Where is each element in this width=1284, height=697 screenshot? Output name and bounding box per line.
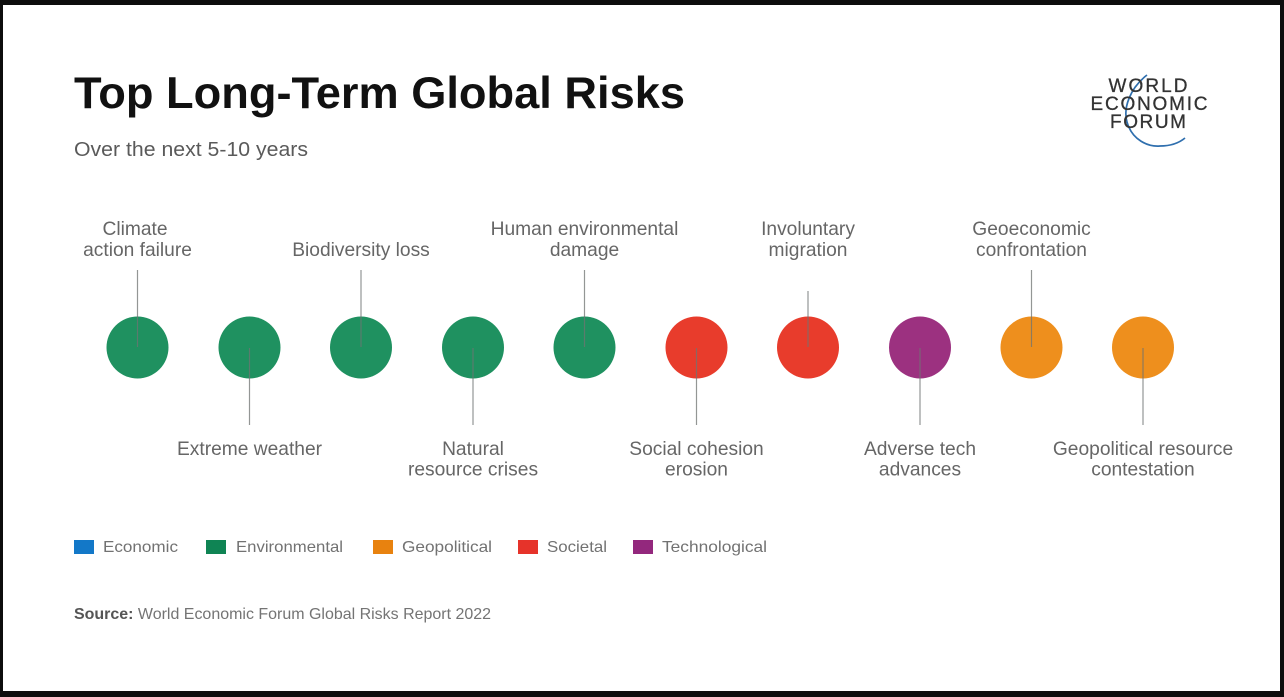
legend: Societal xyxy=(518,539,607,556)
risk: Biodiversity loss xyxy=(292,240,430,378)
logo: World Economic Forum xyxy=(1090,75,1208,146)
risk: Involuntary migration: Involuntary xyxy=(761,219,855,240)
risk: Human environmental damage: damage xyxy=(550,240,619,261)
risk: Geoeconomic confrontation: confrontation xyxy=(976,240,1087,261)
risk: Natural resource crises: resource crises xyxy=(408,460,538,480)
risk: Climate action failure: action failure xyxy=(83,240,192,261)
risk: Geopolitical resource contestation: Geopolitical resource xyxy=(1053,439,1233,460)
risk: Extreme weather xyxy=(177,316,323,460)
risk: Involuntary migration: migration xyxy=(769,240,847,261)
risk: Natural resource crises xyxy=(408,316,538,480)
risk: Adverse tech advances xyxy=(864,316,976,480)
logo: World Economic Forum: WORLD xyxy=(1108,76,1188,97)
legend: Geopolitical: Geopolitical xyxy=(402,539,492,556)
risk: Geoeconomic confrontation xyxy=(972,219,1091,378)
legend: Societal: Societal xyxy=(547,539,607,556)
risk: Involuntary migration xyxy=(761,219,855,378)
risk: Adverse tech advances: Adverse tech xyxy=(864,439,976,460)
logo: World Economic Forum: FORUM xyxy=(1110,112,1186,133)
risk: Social cohesion erosion xyxy=(629,316,764,480)
risk: Natural resource crises: Natural xyxy=(442,439,504,460)
risk: Climate action failure: Climate xyxy=(102,219,168,240)
title: Top Long-Term Global Risks xyxy=(74,69,685,118)
risk: Climate action failure xyxy=(83,219,192,378)
risk: Social cohesion erosion: Social cohesion xyxy=(629,439,764,460)
subtitle: Over the next 5-10 years xyxy=(74,139,308,161)
risk: Geopolitical resource contestation xyxy=(1053,316,1233,480)
risk: Extreme weather: Extreme weather xyxy=(177,439,323,460)
risk: Geopolitical resource contestation: contestation xyxy=(1091,460,1195,480)
logo: World Economic Forum: ECONOMIC xyxy=(1090,94,1208,115)
legend: Technological: Technological xyxy=(662,539,767,556)
legend xyxy=(74,539,767,556)
risk: Human environmental damage: Human environmental xyxy=(491,219,678,240)
legend: Environmental: Environmental xyxy=(236,539,343,556)
risk: Geoeconomic confrontation: Geoeconomic xyxy=(972,219,1091,240)
risk: Adverse tech advances: advances xyxy=(879,460,961,480)
risk: Biodiversity loss: Biodiversity loss xyxy=(292,240,430,261)
risk: Social cohesion erosion: erosion xyxy=(665,460,728,480)
legend: Economic: Economic xyxy=(103,539,178,556)
source note: Source: World Economic Forum Global Risks Report 2022 xyxy=(74,606,491,623)
risk: Human environmental damage xyxy=(491,219,678,378)
legend: Economic xyxy=(74,539,178,556)
